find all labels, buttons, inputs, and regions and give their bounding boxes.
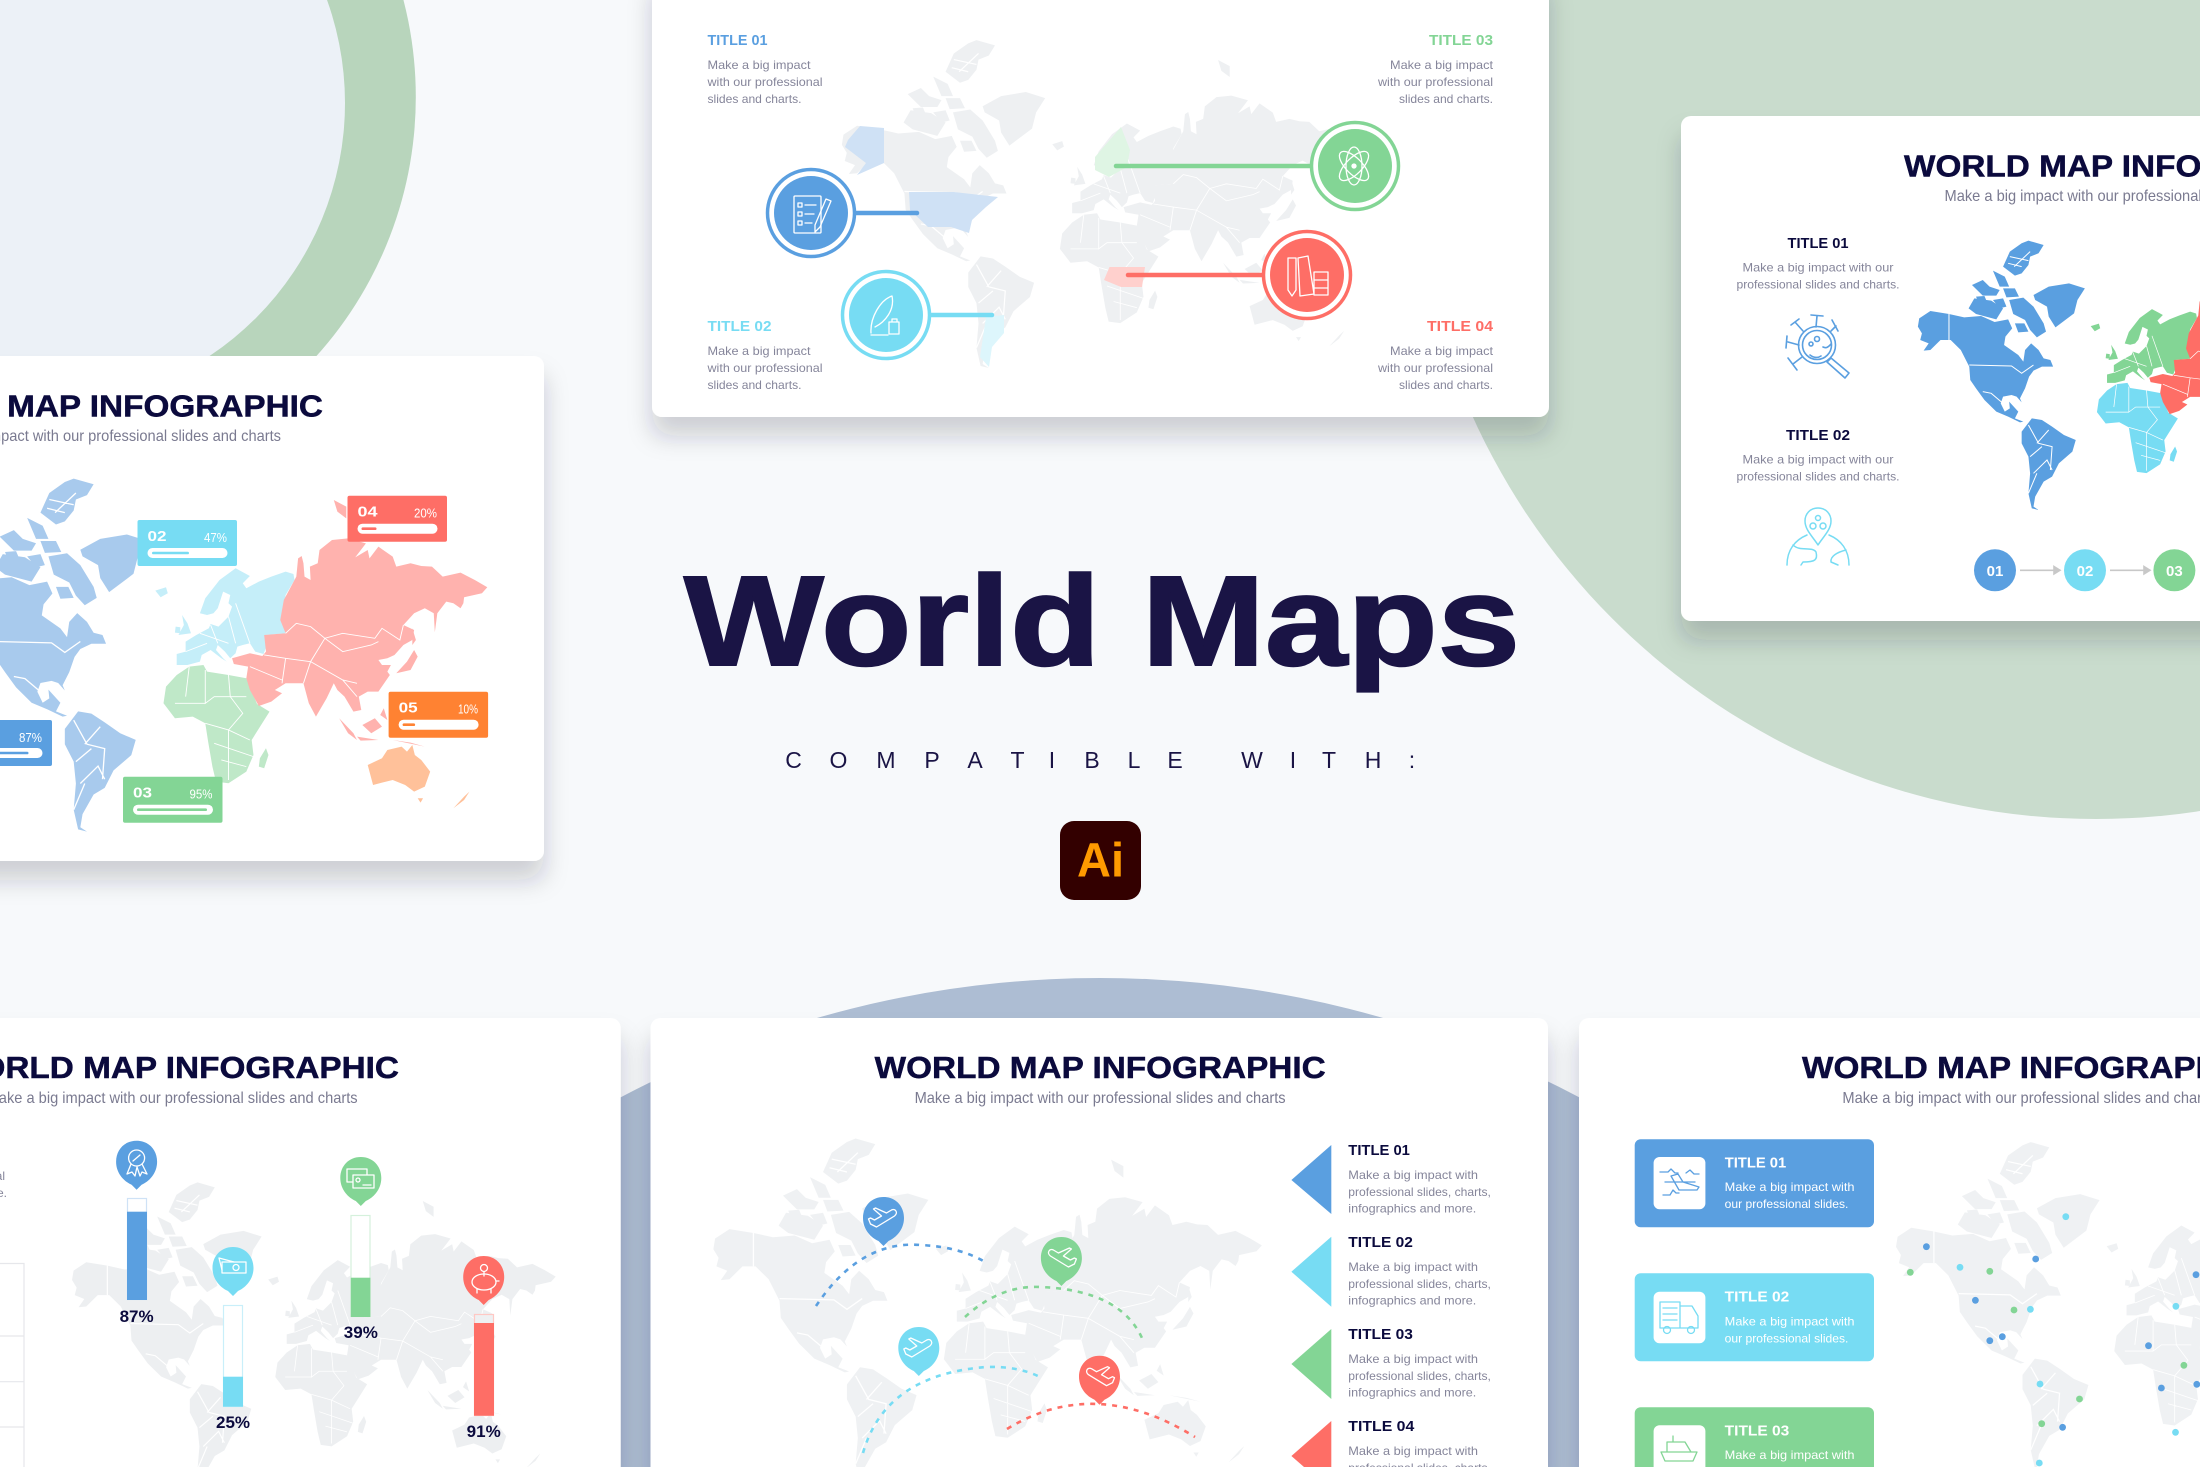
arrow 1	[2020, 566, 2060, 574]
label 03: 03	[133, 785, 152, 802]
item 03: professional slides, charts,	[1348, 1369, 1491, 1383]
text: title 01: Make a big impact	[708, 58, 811, 72]
label 04: 04	[358, 504, 378, 521]
card 02	[1635, 1273, 1874, 1361]
text: title 04: TITLE 04	[1427, 318, 1494, 335]
text: title 02: TITLE 02	[1786, 427, 1850, 444]
decorative circle: right green	[1412, 0, 2200, 819]
icon: virus under magnifier	[1786, 315, 1849, 378]
step 03	[2153, 549, 2195, 591]
column 87%: 87%	[120, 1307, 154, 1326]
text: title 02: slides and charts.	[708, 378, 802, 392]
text: title 01: TITLE 01	[1788, 235, 1848, 252]
text: title 04: with our professional	[1377, 361, 1493, 375]
label 02: 02	[148, 528, 166, 545]
highlighted countries	[845, 126, 1145, 367]
callout: green atom	[1116, 122, 1398, 210]
text: title 03: with our professional	[1377, 75, 1493, 89]
pin: cyan plane	[898, 1327, 939, 1376]
card 02: TITLE 02	[1725, 1289, 1789, 1306]
text: title 01	[1736, 235, 1900, 292]
panel: top centre slide	[652, 0, 1549, 417]
heading: WORLD MAP INFOGRAPHIC	[875, 1050, 1326, 1085]
title: World Maps	[684, 550, 1520, 693]
text: title 01: with our professional	[706, 75, 822, 89]
route: blue	[816, 1245, 985, 1306]
label 01: 87%	[19, 730, 42, 745]
route: cyan	[863, 1367, 1040, 1453]
panel: right slide	[1681, 116, 2200, 621]
card 03: TITLE 03	[1725, 1423, 1789, 1440]
icon: credit cards	[347, 1169, 374, 1188]
callout: blue checklist	[768, 170, 917, 256]
step 02: 02	[2077, 563, 2093, 580]
decorative circle: bottom blue-grey	[620, 978, 1579, 1467]
card 01	[1635, 1139, 1874, 1227]
callout: red books	[1128, 232, 1350, 318]
item 02: professional slides, charts,	[1348, 1277, 1491, 1291]
item 02: infographics and more.	[1348, 1294, 1476, 1308]
column 87%	[116, 1141, 157, 1326]
label 01	[0, 720, 52, 766]
route: green	[965, 1287, 1142, 1338]
column 91%: 91%	[467, 1422, 501, 1441]
text: title 04	[1377, 318, 1494, 392]
subtitle: Make a big impact with our professional slides and charts	[915, 1090, 1286, 1107]
item 01: professional slides, charts,	[1348, 1185, 1491, 1199]
icon: biohazard pin on globe	[1787, 508, 1849, 565]
card 02: Make a big impact with	[1725, 1314, 1854, 1328]
table outline	[0, 1264, 24, 1467]
item 01: infographics and more.	[1348, 1202, 1476, 1216]
text: title 03: TITLE 03	[1429, 32, 1493, 49]
arrow 2	[2110, 566, 2150, 574]
step 03: 03	[2166, 563, 2183, 580]
world map grey	[713, 1139, 1262, 1467]
item 04	[1291, 1418, 1491, 1467]
text: title 04: Make a big impact	[1390, 344, 1494, 358]
column 39%	[340, 1157, 381, 1342]
label 02: 47%	[204, 530, 227, 545]
item 01: TITLE 01	[1348, 1142, 1410, 1159]
card 02: our professional slides.	[1725, 1332, 1848, 1346]
item 03	[1291, 1326, 1491, 1400]
icon: Adobe Illustrator	[1060, 821, 1141, 900]
text: title 01: Make a big impact with our	[1742, 260, 1894, 274]
label 05: 05	[399, 700, 418, 717]
text: title 02: professional slides and charts.	[1736, 470, 1900, 484]
label 05	[389, 692, 488, 738]
panel: bottom centre slide	[650, 1018, 1548, 1467]
pin: red plane	[1079, 1356, 1120, 1405]
item 03: infographics and more.	[1348, 1386, 1476, 1400]
label 03	[123, 777, 222, 823]
label 04	[348, 496, 447, 542]
label 05: 10%	[458, 702, 478, 717]
decorative circle: top left pale blue	[0, 0, 345, 407]
text: title 01: professional slides and charts.	[1736, 278, 1900, 292]
icon: badge	[127, 1150, 147, 1176]
item 02	[1291, 1234, 1491, 1308]
text: title 02: Make a big impact with our	[1742, 452, 1894, 466]
cropped side text	[0, 1172, 6, 1197]
route: red	[1007, 1404, 1195, 1437]
text: title 03: slides and charts.	[1399, 92, 1493, 106]
icon: plane	[1660, 1169, 1699, 1195]
text: title 03: Make a big impact	[1390, 58, 1494, 72]
item 02: Make a big impact with	[1348, 1260, 1478, 1274]
card 01: Make a big impact with	[1725, 1180, 1854, 1194]
column 39%: 39%	[344, 1323, 378, 1342]
panel: left slide	[0, 356, 544, 861]
pin: blue plane	[863, 1197, 904, 1246]
column 25%: 25%	[216, 1413, 250, 1432]
item 01	[1291, 1142, 1491, 1216]
world map grey	[72, 1182, 556, 1467]
card 03: Make a big impact with	[1725, 1448, 1854, 1462]
item 02: TITLE 02	[1348, 1234, 1413, 1251]
decorative circle: top left green ring	[0, 0, 416, 484]
column 91%	[463, 1256, 504, 1441]
item 04: Make a big impact with	[1348, 1444, 1478, 1458]
text: title 02: Make a big impact	[708, 344, 811, 358]
label 03: 95%	[190, 787, 213, 802]
step 01	[1974, 549, 2016, 591]
subtitle: compatible with: COMPATIBLE WITH:	[785, 747, 1415, 773]
world map grey	[1896, 1142, 2200, 1467]
text: title 02	[1736, 427, 1900, 484]
callout: cyan quill	[842, 272, 992, 358]
text: title 01	[706, 32, 822, 106]
column 25%	[212, 1247, 254, 1432]
icon: ship	[1661, 1436, 1697, 1461]
text: title 02: with our professional	[706, 361, 822, 375]
text: title 02	[706, 318, 822, 392]
text: title 03	[1377, 32, 1494, 106]
coloured world map	[0, 479, 487, 832]
coloured world map	[1918, 241, 2200, 510]
item 01: Make a big impact with	[1348, 1168, 1478, 1182]
text: title 01: TITLE 01	[708, 32, 768, 49]
label 02	[138, 520, 237, 566]
text: title 01: slides and charts.	[708, 92, 802, 106]
item 03: Make a big impact with	[1348, 1352, 1478, 1366]
label 04: 20%	[414, 506, 437, 521]
text: title 04: slides and charts.	[1399, 378, 1493, 392]
panel: bottom left slide	[0, 1018, 621, 1467]
icon: truck	[1660, 1302, 1698, 1334]
item 04: TITLE 04	[1348, 1418, 1415, 1435]
card 03	[1635, 1407, 1874, 1467]
map dots	[1907, 1213, 2200, 1466]
icon: piggy bank	[472, 1264, 499, 1293]
panel: bottom right slide	[1579, 1018, 2200, 1467]
item 03: TITLE 03	[1348, 1326, 1413, 1343]
text: title 02: TITLE 02	[708, 318, 772, 335]
icon: Adobe Illustrator: Ai	[1077, 834, 1124, 888]
step 01: 01	[1987, 563, 2003, 580]
icon: banknote	[219, 1258, 246, 1273]
step 02	[2064, 549, 2106, 591]
card 01: TITLE 01	[1725, 1154, 1786, 1172]
pin: green plane	[1041, 1237, 1082, 1286]
world map grey	[842, 40, 1361, 368]
card 01: our professional slides.	[1725, 1197, 1848, 1211]
